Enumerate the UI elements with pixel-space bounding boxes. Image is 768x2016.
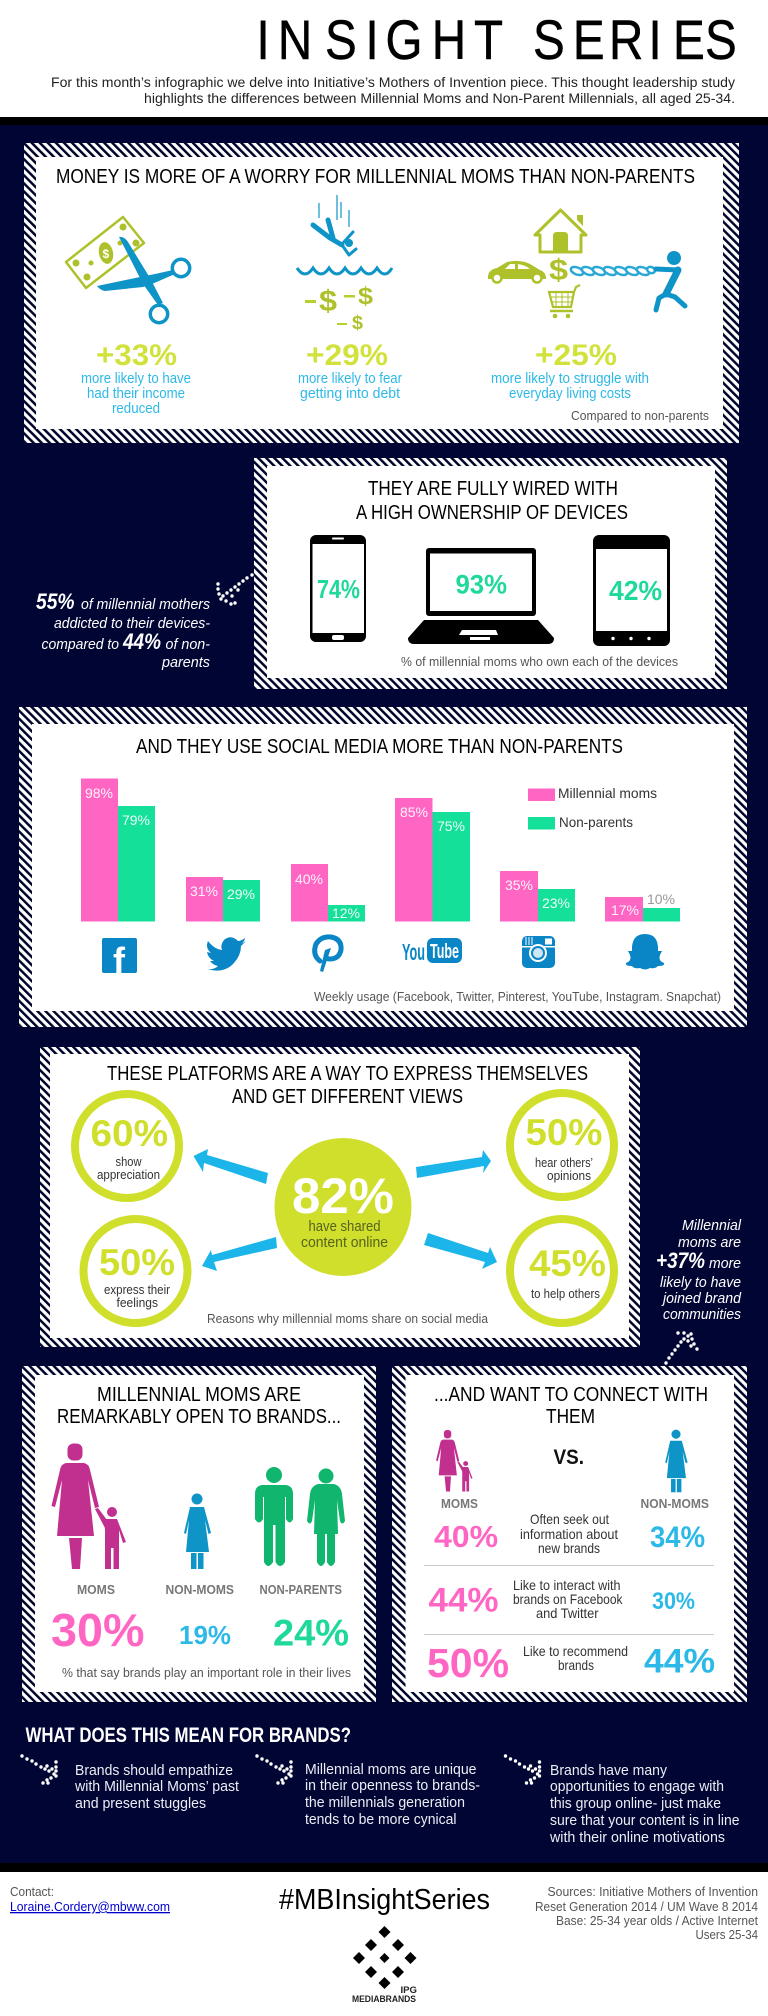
arrow: to 45% [424, 1233, 497, 1269]
icon: facebook: f [113, 940, 126, 981]
heading: connect: ...AND WANT TO CONNECT WITH [434, 1384, 708, 1406]
icon: smartphone 74% [310, 535, 366, 642]
icon: snapchat [626, 934, 664, 970]
panel: open to brands [22, 1366, 376, 1702]
text: implication 2: tends to be more cynical [305, 1812, 456, 1828]
heading: connect: THEM [546, 1406, 595, 1428]
row: seek out information: 34% [650, 1521, 705, 1554]
icon: facebook [102, 938, 137, 981]
row: interact [428, 1577, 695, 1621]
bar chart: weekly usage: 29% [227, 886, 255, 902]
footer: contact: Contact: [10, 1884, 54, 1899]
stat: +29%: more likely to fear [298, 370, 402, 387]
callout: brand communities: more [709, 1256, 741, 1272]
heading: open to brands [57, 1384, 341, 1428]
text: implication 3: with their online motivations [549, 1830, 725, 1846]
row: seek out information: 40% [434, 1519, 498, 1554]
icon: person falling into debt: $ [319, 285, 337, 318]
circle: 82% shared: have shared [308, 1218, 380, 1235]
icon: living costs tug of war: $ [549, 254, 568, 287]
arrow: to 50% feelings [202, 1237, 277, 1271]
stat: +25%: +25% [535, 339, 617, 372]
arrow: to 60% [194, 1149, 268, 1184]
legend: Non-parents [559, 814, 633, 830]
row: interact: 30% [652, 1588, 695, 1615]
heading: platforms: AND GET DIFFERENT VIEWS [232, 1086, 463, 1108]
title: INSIGHT SERIES [257, 9, 737, 72]
stat: +33%: more likely to have [81, 370, 191, 387]
text: implication 3: this group online- just make [550, 1796, 721, 1812]
bar chart: weekly usage: 35% [505, 877, 533, 893]
row: interact: 44% [428, 1582, 498, 1620]
icon: dots 2 [255, 1754, 293, 1785]
row: seek out information: new brands [538, 1540, 600, 1556]
intro text: For this month’s infographic we delve into Initiative’s Mothers of Invention piece. This thought leadership study [51, 75, 735, 90]
stat: +33% [81, 339, 191, 417]
labels: segments: NON-PARENTS [260, 1582, 342, 1597]
row: interact: and Twitter [536, 1605, 599, 1621]
icon: person falling into debt: $ [352, 313, 363, 334]
row: recommend: Like to recommend [523, 1643, 628, 1659]
bar chart: weekly usage: 12% [332, 905, 360, 921]
circle: 50% feelings: feelings [116, 1295, 158, 1310]
text: implication 1: with Millennial Moms’ past [74, 1779, 239, 1795]
text: implication 3: Brands have many [550, 1763, 668, 1779]
caption: devices: % of millennial moms who own each of the devices [401, 654, 678, 669]
circle: 60% appreciation [75, 1094, 179, 1198]
row: interact: brands on Facebook [513, 1591, 623, 1607]
text: implication 2: the millennials generation [305, 1795, 465, 1811]
logo: IPG Mediabrands [352, 1926, 417, 2004]
arrow: to 50% opinions [416, 1150, 491, 1178]
bar chart: weekly usage: 31% [190, 883, 218, 899]
icon: small mom [436, 1430, 473, 1492]
text: implication 2 [305, 1762, 480, 1828]
heading: open to brands: REMARKABLY OPEN TO BRANDS... [57, 1406, 341, 1428]
row: recommend: 44% [644, 1642, 715, 1680]
stat: +33%: had their income [87, 385, 185, 402]
vs: VS. [554, 1446, 584, 1469]
logo: IPG Mediabrands: IPG [400, 1985, 417, 1995]
circle: 60% appreciation: appreciation [97, 1167, 160, 1182]
circle: 60% appreciation: 60% [90, 1113, 168, 1154]
text: implication 1: and present stuggles [75, 1796, 206, 1812]
row: seek out information [434, 1511, 705, 1556]
legend: Millennial moms [558, 785, 657, 801]
bar chart: weekly usage: 23% [542, 895, 570, 911]
callout: addicted to devices: compared to [42, 637, 119, 653]
icon: pinterest [315, 937, 341, 972]
panel: social media [19, 707, 747, 1027]
icon: living costs tug of war [488, 210, 685, 318]
stat: +25%: more likely to struggle with [491, 370, 649, 387]
heading: what does this mean: WHAT DOES THIS MEAN FOR BRANDS? [26, 1724, 351, 1747]
legend [528, 785, 657, 830]
callout: brand communities: Millennial [682, 1218, 742, 1234]
stats: brand role: 24% [273, 1612, 349, 1654]
icon: laptop 93%: 93% [456, 570, 507, 600]
footer: contact: Loraine.Cordery@mbww.com [10, 1899, 170, 1914]
circle: 82% shared [274, 1138, 412, 1276]
circle: 50% feelings [84, 1219, 188, 1323]
icon: person falling into debt [297, 195, 392, 334]
caption: brand role: % that say brands play an important role in their lives [62, 1665, 351, 1680]
heading: open to brands: MILLENNIAL MOMS ARE [97, 1384, 301, 1406]
callout: addicted to devices: 44% [122, 629, 161, 654]
note: compared: Compared to non-parents [571, 408, 709, 423]
row: interact: Like to interact with [513, 1577, 620, 1593]
stats: brand role: 30% [51, 1604, 144, 1656]
text: implication 1 [74, 1763, 239, 1812]
stat: +29%: getting into debt [300, 385, 401, 402]
footer: sources [535, 1884, 758, 1942]
circle: 50% opinions: 50% [526, 1112, 602, 1153]
icon: non-mom [184, 1494, 211, 1569]
heading: social: AND THEY USE SOCIAL MEDIA MORE THAN NON-PARENTS [136, 736, 623, 758]
caption: platforms: Reasons why millennial moms share on social media [207, 1311, 489, 1326]
text: implication 3 [549, 1763, 740, 1846]
callout: brand communities: +37% [656, 1248, 705, 1273]
circle: 50% opinions [510, 1093, 614, 1197]
icon: youtube: Tube [430, 941, 459, 963]
row: seek out information: Often seek out [530, 1511, 609, 1527]
footer: hashtag: #MBInsightSeries [279, 1884, 490, 1916]
heading: platforms [107, 1063, 588, 1108]
stat: +29%: +29% [306, 339, 388, 372]
text: implication 2: in their openness to brands- [305, 1778, 480, 1794]
callout: addicted to devices: parents [161, 655, 210, 671]
caption: social: Weekly usage (Facebook, Twitter, Pinterest, YouTube, Instagram. Snapchat) [314, 989, 721, 1004]
callout: brand communities: likely to have [660, 1275, 741, 1291]
circle: 50% opinions: opinions [547, 1168, 591, 1183]
icon: dots 3 [504, 1754, 541, 1785]
bar chart: weekly usage: 40% [295, 871, 323, 887]
icon: mom and child [52, 1444, 126, 1569]
icon: scissors cutting money: $ [102, 247, 110, 261]
labels: segments: MOMS [77, 1582, 115, 1597]
panel: money worry [24, 143, 739, 443]
text: implication 3: opportunities to engage with [550, 1779, 724, 1795]
panel: connect [392, 1366, 747, 1702]
panel: platforms [40, 1047, 640, 1347]
text: implication 2: Millennial moms are unique [305, 1762, 476, 1778]
icon: instagram [522, 936, 555, 968]
icon: small non-mom [665, 1430, 688, 1492]
icon: youtube [402, 938, 462, 965]
stat: +25%: everyday living costs [509, 385, 631, 402]
row: recommend: brands [558, 1657, 594, 1673]
callout: brand communities [656, 1218, 742, 1323]
text: implication 3: sure that your content is in line [550, 1813, 740, 1829]
icon: youtube: You [402, 939, 425, 965]
intro text [51, 75, 735, 106]
bar chart: weekly usage: 75% [437, 818, 465, 834]
labels: segments: NON-MOMS [166, 1582, 234, 1597]
row: recommend: 50% [427, 1640, 509, 1686]
footer: contact [10, 1884, 170, 1914]
row: recommend [427, 1640, 715, 1686]
circle: 45% help: 45% [529, 1243, 606, 1284]
text: implication 1: Brands should empathize [75, 1763, 233, 1779]
bar chart: weekly usage: 98% [85, 785, 113, 801]
heading: devices: THEY ARE FULLY WIRED WITH [368, 478, 618, 500]
callout: addicted to devices: of millennial mothers [81, 597, 210, 613]
callout: brand communities: joined brand [661, 1291, 742, 1307]
icon: tablet 42% [593, 535, 670, 646]
stats: brand role [51, 1604, 349, 1656]
callout: addicted to devices: addicted to their devices- [54, 616, 210, 632]
heading: connect [434, 1384, 708, 1428]
arrow: dotted to devices [216, 573, 254, 606]
bar chart: weekly usage: 17% [611, 902, 639, 918]
footer: sources: Sources: Initiative Mothers of Invention [548, 1884, 758, 1899]
circle: 82% shared: 82% [292, 1168, 394, 1224]
circle: 50% opinions: hear others’ [535, 1155, 593, 1170]
logo: IPG Mediabrands: MEDIABRANDS [352, 1994, 416, 2004]
callout: brand communities: moms are [678, 1235, 741, 1251]
heading: devices [356, 478, 628, 524]
footer: sources: Users 25-34 [696, 1927, 758, 1942]
callout: addicted to devices: 55% [36, 589, 74, 614]
intro text: highlights the differences between Millennial Moms and Non-Parent Millennials, all aged 25-34. [144, 91, 735, 106]
panel: devices [254, 458, 727, 689]
labels: moms vs non-moms [441, 1496, 709, 1511]
circle: 82% shared: content online [301, 1234, 388, 1251]
stat: +33%: +33% [96, 339, 177, 372]
callout: brand communities: communities [663, 1307, 741, 1323]
labels: moms vs non-moms: NON-MOMS [640, 1496, 709, 1511]
labels: segments [77, 1582, 342, 1597]
bar chart: weekly usage [81, 778, 680, 922]
icon: tablet 42%: 42% [609, 575, 662, 606]
callout: addicted to devices [36, 589, 210, 671]
heading: devices: A HIGH OWNERSHIP OF DEVICES [356, 502, 628, 524]
icon: smartphone 74%: 74% [317, 574, 360, 604]
circle: 50% feelings: express their [104, 1282, 171, 1297]
circle: 50% feelings: 50% [99, 1242, 175, 1283]
icon: dots 1 [20, 1754, 58, 1785]
icon: twitter [207, 937, 246, 971]
stats: brand role: 19% [179, 1620, 231, 1650]
stat: +33%: reduced [112, 400, 160, 417]
icon: person falling into debt: $ [358, 283, 374, 310]
bar chart: weekly usage: 85% [400, 804, 428, 820]
stat: +25% [491, 339, 649, 402]
icon: scissors cutting money [66, 217, 190, 323]
circle: 45% help: to help others [531, 1286, 600, 1301]
callout: addicted to devices: of non- [166, 637, 210, 653]
heading: platforms: THESE PLATFORMS ARE A WAY TO EXPRESS THEMSELVES [107, 1063, 588, 1085]
circle: 60% appreciation: show [116, 1154, 142, 1169]
stat: +29% [298, 339, 402, 402]
labels: moms vs non-moms: MOMS [441, 1496, 478, 1511]
arrow: dotted to connect panel [664, 1331, 699, 1365]
icon: laptop 93% [408, 548, 554, 644]
circle: 45% help [510, 1219, 614, 1323]
bar chart: weekly usage: 10% [647, 891, 675, 907]
bar chart: weekly usage: 79% [122, 812, 150, 828]
row: seek out information: information about [520, 1526, 618, 1542]
icon: non-parents [255, 1467, 345, 1566]
